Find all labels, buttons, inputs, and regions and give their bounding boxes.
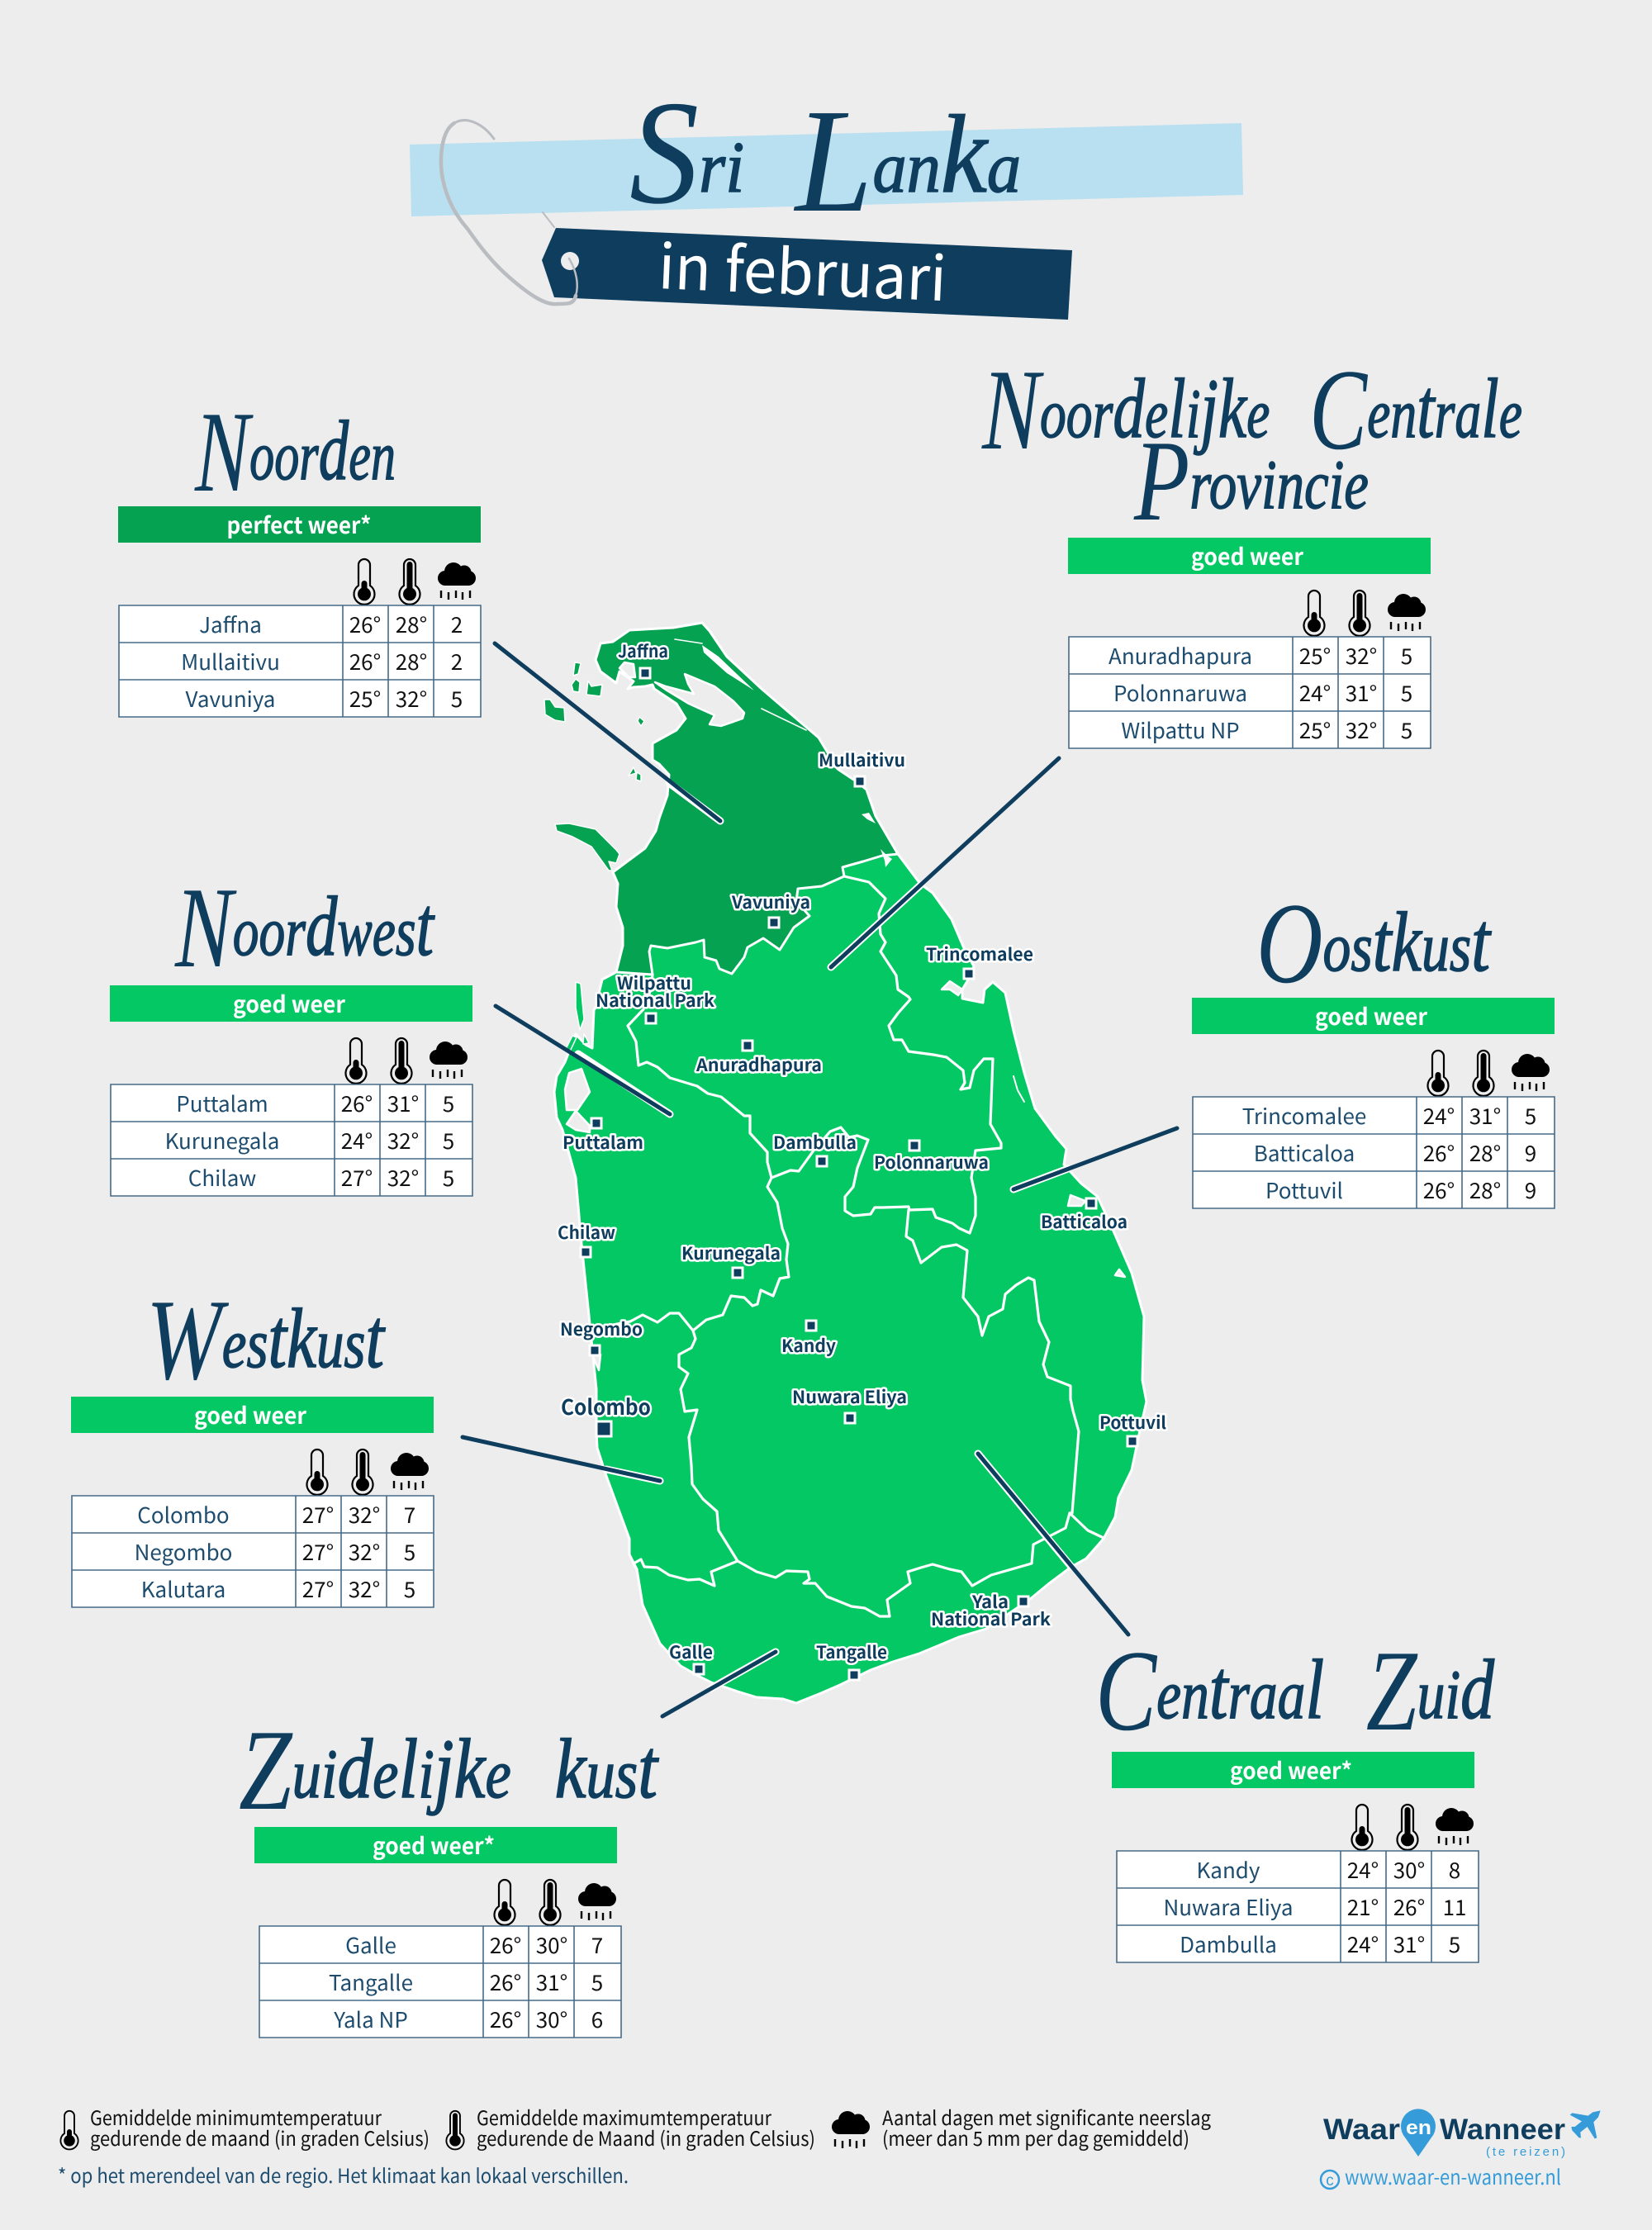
- map place labels: Polonnaruwa: [874, 1150, 989, 1174]
- panel: Noordwest: [110, 864, 472, 1196]
- table group: Oostkust: 5: [1525, 1100, 1536, 1131]
- table group: Oostkust: 26°: [1423, 1174, 1455, 1205]
- table group: Noorden: 2: [451, 609, 463, 639]
- subtitle: in februari: in februari: [657, 218, 948, 319]
- table group: Noorden: 28°: [396, 609, 427, 639]
- map place labels: Jaffna: [618, 638, 668, 663]
- heading: Zuidelijke kust: Zuidelijke kust: [239, 1706, 659, 1834]
- region boundaries: [588, 876, 1104, 1616]
- table group: Oostkust: 24°: [1423, 1100, 1455, 1131]
- title: Sri Lanka: ka: [941, 93, 1023, 216]
- table group: Noorden: 5: [451, 683, 463, 714]
- heading: Centraal Zuid: Centraal Zuid: [1095, 1627, 1494, 1755]
- table group: Centraal Zuid: 24°: [1347, 1854, 1379, 1885]
- table group: Noorden: 26°: [349, 646, 381, 676]
- table group: Noorden: Jaffna: [199, 609, 262, 639]
- table group: Noordelijke Centrale Provincie: 5: [1401, 714, 1412, 745]
- table group: Noordelijke Centrale Provincie: Wilpattu NP: [1121, 714, 1240, 745]
- table group: Noorden: Vavuniya: [186, 683, 275, 714]
- table group: Westkust: 27°: [302, 1573, 334, 1604]
- map place labels: Tangalle: [816, 1639, 887, 1664]
- table group: Noordwest: 31°: [387, 1088, 419, 1118]
- table group: Noordwest: 32°: [387, 1162, 419, 1193]
- table group: Westkust: 27°: [302, 1499, 334, 1530]
- table group: Noordelijke Centrale Provincie: 5: [1401, 640, 1412, 671]
- legend text: maximum temperature: Gemiddelde maximumtemperatuur: [477, 2102, 772, 2131]
- table group: Westkust: Kalutara: [141, 1573, 225, 1604]
- lagoons and coastal cuts: [565, 639, 1125, 1370]
- title block: [410, 70, 1243, 320]
- table group: Oostkust: 28°: [1469, 1174, 1501, 1205]
- table group: Oostkust: Batticaloa: [1254, 1137, 1355, 1168]
- map place labels: Colombo: [561, 1391, 651, 1421]
- legend icon: rain days: [832, 2111, 870, 2148]
- tag: [542, 228, 1072, 320]
- table group: Westkust: 32°: [349, 1499, 380, 1530]
- table group: Oostkust: Pottuvil: [1265, 1174, 1343, 1205]
- logo: Waar en Wanneer: [1321, 2109, 1601, 2191]
- map place labels: National Park: [931, 1606, 1051, 1631]
- map place labels: [558, 638, 1166, 1664]
- table group: Noordelijke Centrale Provincie: 25°: [1299, 714, 1331, 745]
- panel: Oostkust: [1192, 880, 1555, 1208]
- table group: Centraal Zuid: Kandy: [1197, 1854, 1260, 1885]
- logo wordmark: [1323, 2114, 1565, 2146]
- table group: Noordwest: goed weer: [233, 987, 346, 1020]
- map place labels: Nuwara Eliya: [792, 1384, 907, 1409]
- table group: Westkust: 5: [404, 1536, 415, 1567]
- legend text: maximum temperature: [477, 2102, 815, 2152]
- panel: Centraal Zuid: [1095, 1627, 1494, 1962]
- tag hole: [561, 252, 579, 270]
- legend text: rain days: [882, 2102, 1211, 2152]
- table group: Noordwest: 5: [443, 1088, 454, 1118]
- logo wordmark: Wanneer: [1440, 2114, 1565, 2146]
- map markers: [581, 668, 1137, 1680]
- table group: Westkust: 32°: [349, 1573, 380, 1604]
- heading: Noorden: Noorden: [194, 388, 396, 516]
- map place labels: Trincomalee: [926, 942, 1033, 966]
- table group: Noordwest: Puttalam: [176, 1088, 268, 1118]
- map place labels: Yala: [971, 1589, 1009, 1614]
- table group: Zuidelijke kust: 26°: [490, 2004, 521, 2034]
- table group: Noorden: 28°: [396, 646, 427, 676]
- table group: Zuidelijke kust: 7: [591, 1929, 603, 1960]
- map place labels: Chilaw: [558, 1220, 615, 1245]
- table group: Noordwest: Kurunegala: [165, 1125, 279, 1155]
- table group: Noordwest: 24°: [341, 1125, 373, 1155]
- dark green region: Noorden: [596, 623, 898, 975]
- tag string: [441, 121, 577, 304]
- table group: Noorden: 32°: [396, 683, 427, 714]
- map place labels: Kurunegala: [681, 1241, 781, 1265]
- table group: Centraal Zuid: 26°: [1393, 1891, 1425, 1922]
- table group: Noorden: Mullaitivu: [181, 646, 280, 676]
- table group: Noordelijke Centrale Provincie: 32°: [1346, 714, 1377, 745]
- table group: Oostkust: goed weer: [1315, 999, 1428, 1032]
- logo wordmark: Waar: [1323, 2114, 1400, 2146]
- table group: Westkust: Negombo: [135, 1536, 232, 1567]
- map place labels: Dambulla: [773, 1130, 857, 1155]
- table group: Oostkust: 9: [1525, 1137, 1536, 1168]
- copyright and website: c: [1326, 2172, 1334, 2190]
- legend text: rain days: (meer dan 5 mm per dag gemiddeld): [882, 2123, 1189, 2152]
- table group: Noorden: [118, 506, 481, 717]
- table group: Zuidelijke kust: 26°: [490, 1967, 521, 1997]
- map place labels: Kandy: [781, 1333, 836, 1358]
- legend: [60, 2102, 1211, 2152]
- table group: Noordwest: [110, 985, 472, 1196]
- map place labels: National Park: [596, 988, 714, 1013]
- table group: Noorden: 2: [451, 646, 463, 676]
- table group: Zuidelijke kust: 31°: [536, 1967, 567, 1997]
- table group: Noorden: 25°: [349, 683, 381, 714]
- table group: Westkust: 27°: [302, 1536, 334, 1567]
- title: Sri Lanka: L: [793, 78, 872, 243]
- table group: Centraal Zuid: 11: [1443, 1891, 1466, 1922]
- table group: Zuidelijke kust: 6: [591, 2004, 603, 2034]
- map place labels: Negombo: [560, 1317, 643, 1341]
- table group: Noordwest: 26°: [341, 1088, 373, 1118]
- panel: Noorden: [118, 388, 481, 717]
- table group: Zuidelijke kust: Yala NP: [333, 2004, 408, 2034]
- table group: Noordelijke Centrale Provincie: 25°: [1299, 640, 1331, 671]
- table group: Noordelijke Centrale Provincie: 31°: [1346, 677, 1377, 708]
- table group: Noordelijke Centrale Provincie: 5: [1401, 677, 1412, 708]
- table group: Centraal Zuid: 30°: [1393, 1854, 1425, 1885]
- logo wordmark: en: [1406, 2117, 1431, 2139]
- table group: Westkust: 5: [404, 1573, 415, 1604]
- heading: Oostkust: Oostkust: [1256, 880, 1492, 1008]
- table group: Oostkust: Trincomalee: [1242, 1100, 1366, 1131]
- table group: Centraal Zuid: 8: [1449, 1854, 1460, 1885]
- callout lines: [463, 643, 1177, 1716]
- table group: Zuidelijke kust: 30°: [536, 2004, 567, 2034]
- table group: Zuidelijke kust: 30°: [536, 1929, 567, 1960]
- heading: Noordelijke Centrale Provincie: [981, 346, 1522, 545]
- map place labels: Pottuvil: [1099, 1410, 1166, 1435]
- table group: Centraal Zuid: 24°: [1347, 1929, 1379, 1959]
- light green regions: [554, 851, 1146, 1703]
- table group: Noordwest: 32°: [387, 1125, 419, 1155]
- table group: Zuidelijke kust: Tangalle: [329, 1967, 413, 1997]
- table group: Noorden: perfect weer*: [226, 508, 372, 541]
- footnote: * op het merendeel van de regio. Het klimaat kan lokaal verschillen.: [58, 2160, 629, 2189]
- table group: Noordelijke Centrale Provincie: [1068, 538, 1431, 748]
- table group: Noordwest: 5: [443, 1162, 454, 1193]
- table group: Centraal Zuid: Dambulla: [1180, 1929, 1277, 1959]
- table group: Zuidelijke kust: goed weer*: [373, 1829, 495, 1862]
- islands: [544, 662, 644, 1051]
- table group: Noordelijke Centrale Provincie: 32°: [1346, 640, 1377, 671]
- table group: Oostkust: 26°: [1423, 1137, 1455, 1168]
- table group: Oostkust: [1192, 998, 1555, 1208]
- table group: Oostkust: 31°: [1469, 1100, 1501, 1131]
- title: Sri Lanka: ri: [699, 128, 795, 208]
- panel: Noordelijke Centrale Provincie: [981, 346, 1522, 748]
- map place labels: Vavuniya: [731, 890, 810, 914]
- heading: Westkust: Westkust: [146, 1276, 386, 1404]
- panel: Westkust: [71, 1276, 434, 1607]
- table group: Noordwest: Chilaw: [188, 1162, 256, 1193]
- map place labels: Anuradhapura: [695, 1052, 822, 1077]
- table group: Noorden: 26°: [349, 609, 381, 639]
- icon: plane: [1570, 2110, 1601, 2138]
- table group: Noordwest: 27°: [341, 1162, 373, 1193]
- table group: Noordelijke Centrale Provincie: 24°: [1299, 677, 1331, 708]
- heading: Noordelijke Centrale Provincie: Noordelijke Centrale: [981, 346, 1522, 474]
- logo tagline: (te reizen): [1486, 2145, 1565, 2159]
- legend text: rain days: Aantal dagen met significante neerslag: [882, 2102, 1211, 2131]
- map place labels: Batticaloa: [1041, 1209, 1127, 1234]
- legend icon: minimum temperature: [60, 2111, 78, 2149]
- table group: Zuidelijke kust: 5: [591, 1967, 603, 1997]
- table group: Noordelijke Centrale Provincie: goed weer: [1191, 539, 1304, 572]
- heading: Noordelijke Centrale Provincie: Provincie: [1133, 417, 1369, 545]
- logo pin: [1401, 2109, 1436, 2156]
- legend text: maximum temperature: gedurende de Maand (in graden Celsius): [477, 2123, 815, 2152]
- table group: Centraal Zuid: goed weer*: [1230, 1753, 1352, 1786]
- table group: Noordelijke Centrale Provincie: Anuradhapura: [1108, 640, 1252, 671]
- copyright and website: www.waar-en-wanneer.nl: [1345, 2161, 1561, 2191]
- table group: Centraal Zuid: 21°: [1347, 1891, 1379, 1922]
- table group: Oostkust: 9: [1525, 1174, 1536, 1205]
- table group: Westkust: 32°: [349, 1536, 380, 1567]
- table group: Zuidelijke kust: Galle: [345, 1929, 396, 1960]
- legend text: minimum temperature: gedurende de maand (in graden Celsius): [90, 2123, 430, 2152]
- table group: Westkust: [71, 1397, 434, 1607]
- table group: Westkust: goed weer: [194, 1398, 307, 1431]
- heading: Noordwest: Noordwest: [174, 864, 435, 992]
- table group: Zuidelijke kust: [254, 1827, 621, 2038]
- title: Sri Lanka: an: [872, 128, 941, 208]
- map place labels: Puttalam: [563, 1130, 643, 1155]
- panel: Zuidelijke kust: [239, 1706, 659, 2038]
- title band: [410, 123, 1243, 216]
- legend text: minimum temperature: [90, 2102, 430, 2152]
- legend text: minimum temperature: Gemiddelde minimumtemperatuur: [90, 2102, 382, 2131]
- table group: Westkust: 7: [404, 1499, 415, 1530]
- table group: Centraal Zuid: 31°: [1393, 1929, 1425, 1959]
- map of Sri Lanka: [544, 623, 1146, 1703]
- table group: Zuidelijke kust: 26°: [490, 1929, 521, 1960]
- table group: Westkust: Colombo: [137, 1499, 230, 1530]
- table group: Noordelijke Centrale Provincie: Polonnaruwa: [1113, 677, 1247, 708]
- legend icon: maximum temperature: [446, 2111, 464, 2149]
- table group: Noordwest: 5: [443, 1125, 454, 1155]
- map place labels: Mullaitivu: [819, 747, 905, 772]
- table group: Oostkust: 28°: [1469, 1137, 1501, 1168]
- title: Sri Lanka: S: [629, 70, 699, 235]
- table group: Centraal Zuid: 5: [1449, 1929, 1460, 1959]
- map place labels: Wilpattu: [617, 970, 691, 995]
- table group: Centraal Zuid: [1112, 1752, 1479, 1962]
- map place labels: Galle: [669, 1639, 713, 1664]
- table group: Centraal Zuid: Nuwara Eliya: [1163, 1891, 1294, 1922]
